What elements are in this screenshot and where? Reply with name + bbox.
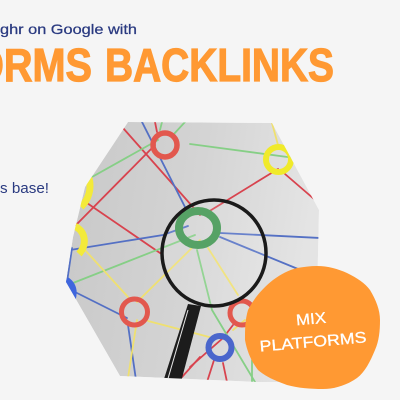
icon: yellow ring right: [266, 147, 291, 172]
icon: magnifier handle: [163, 304, 201, 382]
subtitle text: ghr on Google with: [0, 21, 137, 37]
badge label: PLATFORMS: [259, 329, 367, 356]
badge label: MIX: [295, 310, 327, 329]
badge label: [257, 306, 367, 356]
photo: magnifying glass over connected network: [66, 122, 320, 382]
title: BACKLINKS: [105, 39, 334, 91]
icon: red ring bottom left: [122, 299, 148, 325]
icon: yellow ring left lower: [74, 226, 84, 254]
badge: mix platforms: [245, 266, 380, 389]
icon: magnifier lens ring: [162, 200, 266, 306]
icon: red ring top: [153, 133, 177, 157]
icon: yellow ring left upper: [81, 178, 90, 207]
title: [0, 39, 334, 91]
body text fragment: s base!: [0, 181, 49, 197]
icon: blue ring left: [66, 280, 73, 300]
icon: green ring center: [179, 211, 217, 245]
icon: red ring right: [230, 301, 254, 325]
icon: blue ring bottom: [208, 336, 232, 359]
